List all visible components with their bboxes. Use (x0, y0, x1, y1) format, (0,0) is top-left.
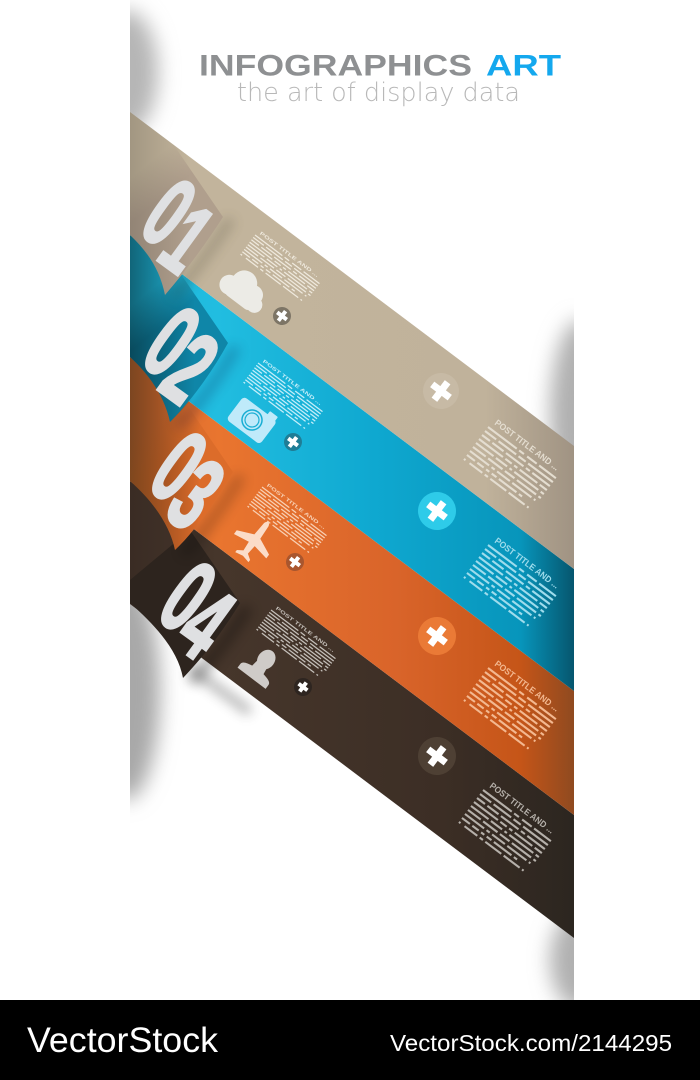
panel: band 03 orange (130, 357, 574, 815)
text block: brown left: POST TITLE AND ... (275, 606, 336, 654)
icon: small plus (280, 429, 306, 455)
text block: beige left: POST TITLE AND ... (259, 231, 320, 279)
text block: orange left: POST TITLE AND ... (266, 483, 327, 531)
text block: blue left: POST TITLE AND ... (262, 359, 323, 407)
number tag 02: 0 (124, 285, 219, 399)
number tag 01: 0 (123, 159, 214, 267)
wall shadows (130, 0, 574, 1000)
number tag 02: 2 (142, 312, 237, 426)
footer bar (0, 1000, 700, 1080)
icon: large plus (410, 484, 464, 538)
panel: band 04 brown (130, 481, 574, 938)
panel: band 02 blue (124, 235, 574, 691)
text block: orange right: POST TITLE AND ... (493, 659, 561, 714)
number tag 04: 4 (158, 567, 253, 681)
icon: cloud (215, 260, 275, 317)
text block: beige right: POST TITLE AND ... (493, 418, 561, 473)
text block: blue left (244, 357, 327, 431)
number tag 04 (130, 530, 253, 681)
icon: large plus (410, 609, 464, 663)
footer image id: VectorStock.com/2144295 (390, 1030, 672, 1056)
icon: large plus (410, 729, 464, 783)
panel: band 01 beige (123, 112, 574, 569)
text block: brown right: POST TITLE AND ... (488, 781, 556, 836)
icon: large plus (416, 366, 466, 416)
number tag 02 (124, 235, 237, 426)
title: infographics art: INFOGRAPHICS (199, 50, 472, 82)
footer brand: VectorStock (27, 1021, 219, 1060)
text block: brown right (459, 779, 559, 873)
text block: blue right: POST TITLE AND ... (493, 536, 561, 591)
text block: orange left (248, 481, 331, 555)
title accent: art: ART (486, 50, 561, 82)
text block: blue right (464, 534, 564, 628)
text block: orange right (464, 657, 564, 751)
text block: beige right (464, 416, 564, 510)
icon: camera (226, 393, 280, 445)
subtitle: the art of display data (237, 78, 520, 108)
number tag 04: 0 (140, 540, 235, 654)
number tag 03: 0 (131, 410, 226, 524)
text block: brown left (257, 604, 340, 678)
icon: airplane (226, 510, 284, 569)
title (199, 50, 561, 108)
icon: small plus (290, 674, 316, 700)
number tag 03: 3 (148, 438, 243, 552)
icon: small plus (269, 303, 295, 329)
number tag 03 (130, 357, 243, 552)
number tag 01 (123, 112, 232, 295)
number tag 01: 1 (141, 186, 232, 294)
icon: person (238, 640, 286, 689)
icon: small plus (282, 549, 308, 575)
text block: beige left (241, 229, 324, 303)
